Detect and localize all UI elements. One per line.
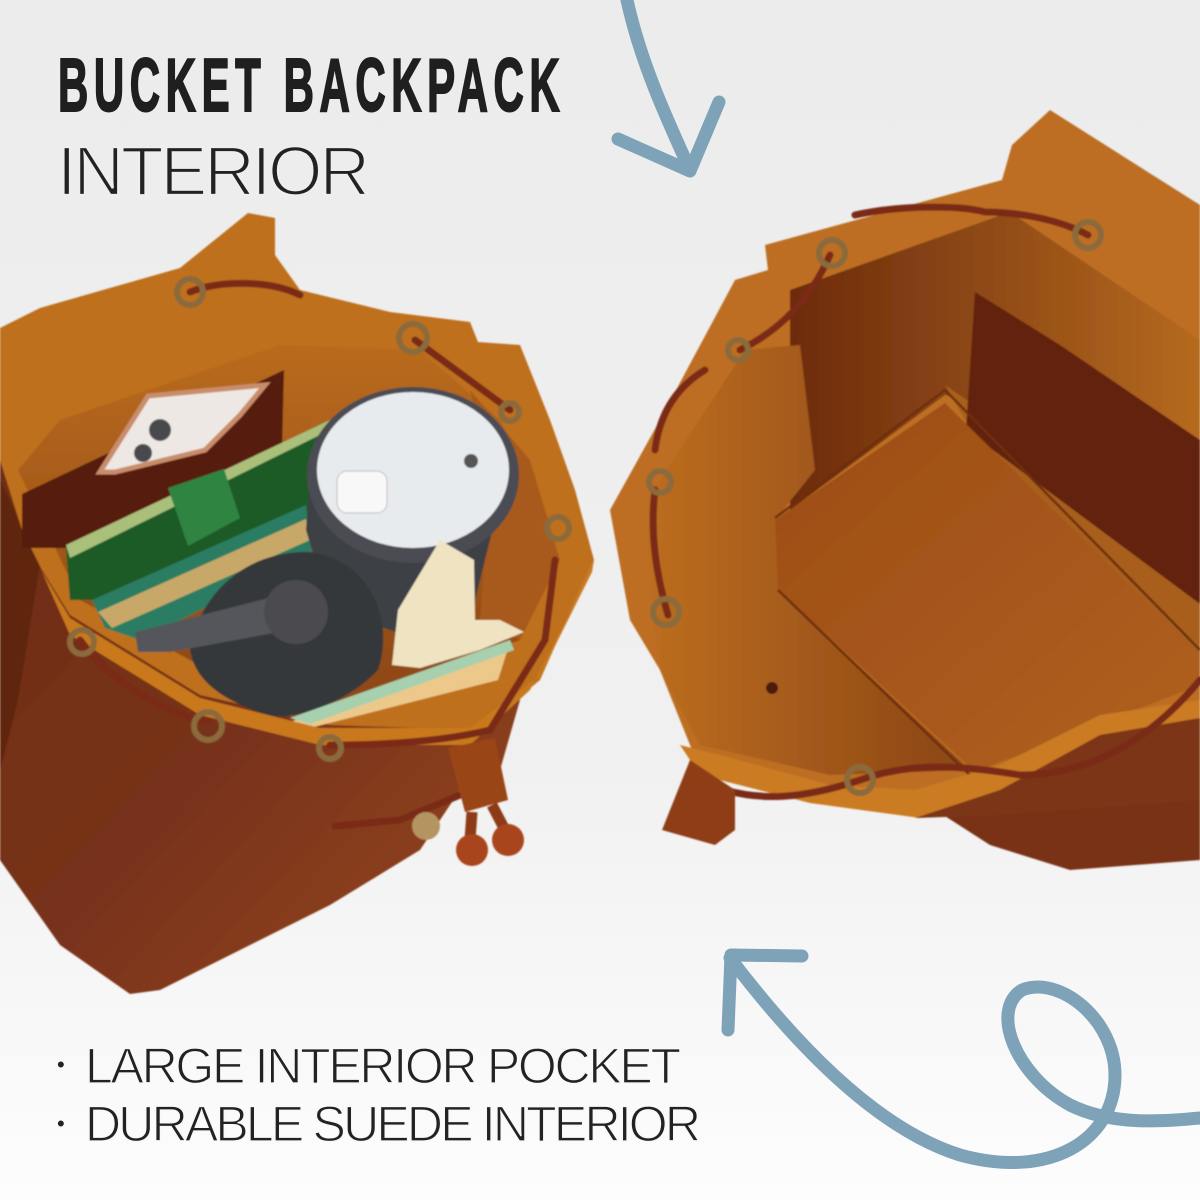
arrow: top arrow pointing at right bag (618, 0, 719, 171)
outer leather base (920, 720, 1200, 870)
black bottle (190, 552, 383, 717)
left backpack (0, 213, 594, 994)
back flap and rim suede (0, 213, 594, 730)
front suede lip (42, 560, 594, 745)
cord lock and knots (448, 738, 508, 812)
printed cloth (392, 540, 524, 668)
side panel seam (0, 480, 40, 770)
tumbler (306, 480, 500, 640)
drawstring cord (653, 207, 1200, 797)
front leather (915, 718, 1200, 818)
zip pouch (92, 505, 312, 640)
interior pocket (22, 370, 284, 548)
interior right wall (470, 390, 560, 640)
title: INTERIOR (57, 132, 370, 210)
feature list (57, 1038, 701, 1152)
front lip (680, 700, 1200, 818)
leather body (0, 440, 520, 994)
feature list: DURABLE SUEDE INTERIOR (85, 1096, 701, 1152)
phone (100, 385, 265, 472)
arrow: bottom looping arrow pointing at right bag (728, 955, 1200, 1163)
green notebook (66, 420, 330, 600)
eyelets (70, 279, 569, 759)
eyelets (649, 222, 1101, 793)
feature list: • (57, 1052, 65, 1077)
cord lock (662, 760, 735, 845)
interior back wall (18, 345, 540, 720)
upper back wall (790, 212, 1200, 510)
book (290, 642, 510, 728)
title: BUCKET BACKPACK (58, 43, 560, 127)
right pocket (966, 292, 1200, 604)
feature list: LARGE INTERIOR POCKET (85, 1038, 681, 1094)
title (57, 43, 560, 210)
left wall suede (640, 345, 970, 775)
snap hole (766, 682, 778, 694)
interior suede rim and flap (610, 110, 1200, 815)
drawstring cord (80, 283, 555, 826)
floor (775, 403, 1200, 772)
feature list: • (57, 1111, 65, 1136)
right backpack (610, 110, 1200, 870)
right wall strip (945, 385, 1200, 680)
